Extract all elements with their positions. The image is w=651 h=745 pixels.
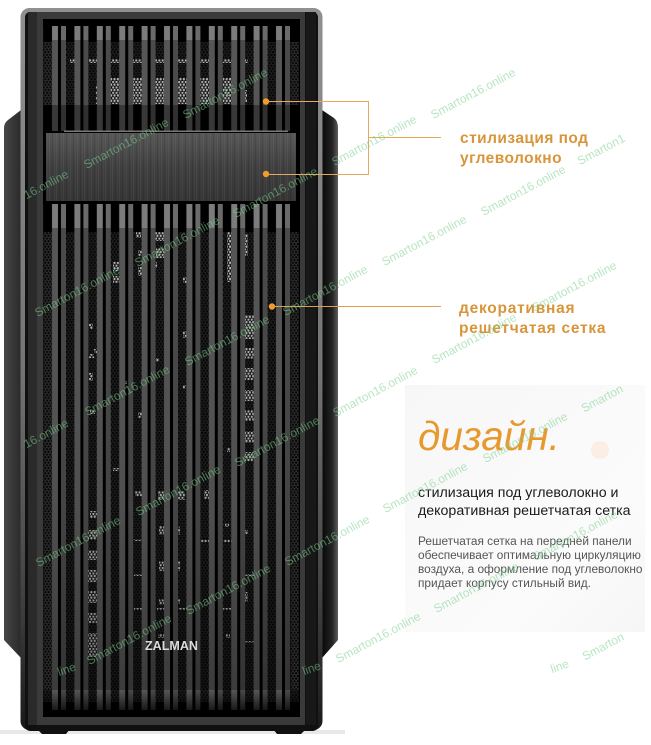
right side bulge xyxy=(322,110,338,658)
carbon fibre panel xyxy=(46,133,296,201)
watermarks: Smarton xyxy=(580,630,626,663)
ZALMAN logo: ZALMAN xyxy=(145,638,198,653)
watermarks: line xyxy=(548,656,571,676)
watermarks: Smarton16.online xyxy=(429,310,519,367)
callout dot top xyxy=(263,98,269,105)
label: decorative mesh: решетчатая сетка xyxy=(459,320,606,337)
lower slats xyxy=(44,204,291,710)
watermarks: Smarton16.online xyxy=(333,609,423,666)
watermarks: line xyxy=(300,658,323,678)
left side bulge xyxy=(4,110,21,658)
watermarks: Smarton16.online xyxy=(81,115,171,172)
front bezel xyxy=(37,12,305,725)
watermarks: Smarton16.online xyxy=(380,459,470,516)
callout: carbon fibre leader lines xyxy=(263,98,441,177)
watermarks: Smarton16.online xyxy=(132,213,222,270)
watermarks: Smarton16.online xyxy=(82,362,172,419)
watermarks: line xyxy=(55,659,78,679)
top slats xyxy=(44,26,291,131)
lower grille xyxy=(43,204,300,710)
watermarks: Smarton16.online xyxy=(232,413,322,470)
floor shadow xyxy=(0,730,345,734)
watermarks: Smarton16.online xyxy=(478,162,568,219)
watermarks: Smarton16.online xyxy=(33,513,123,570)
body text: Решетчатая сетка на передней панели xyxy=(418,534,632,548)
watermarks: Smarton16.online xyxy=(379,212,469,269)
body text: придает корпусу стильный вид. xyxy=(418,576,591,590)
watermarks: Smarton16.online xyxy=(180,65,270,122)
label: carbon fibre styling: углеволокно xyxy=(460,150,562,167)
mesh columns lower xyxy=(44,232,299,702)
watermarks: Smarton16.online xyxy=(282,512,372,569)
watermarks xyxy=(21,65,628,679)
case body xyxy=(20,8,322,730)
white mesh highlights lower xyxy=(88,232,255,657)
watermarks: Smarton16.online xyxy=(230,164,320,221)
watermarks: Smarton16.online xyxy=(529,258,619,315)
watermarks: Smarton16.online xyxy=(428,65,518,122)
faint glow spot xyxy=(591,441,609,459)
body text: обеспечивает оптимальную циркуляцию xyxy=(418,548,641,562)
watermarks: 16.online xyxy=(21,416,71,451)
computer case xyxy=(0,8,345,734)
watermarks: Smarton16.online xyxy=(530,507,620,564)
white mesh highlights top xyxy=(70,59,248,104)
feet xyxy=(37,729,306,734)
watermarks: Smarton16.online xyxy=(431,559,521,616)
callout dot bottom xyxy=(263,171,269,177)
label: carbon fibre styling: стилизация под xyxy=(460,130,588,147)
watermarks: Smarton16.online xyxy=(133,462,223,519)
text card background xyxy=(405,385,645,632)
top grille xyxy=(43,26,300,132)
body text: воздуха, а оформление под углеволокно xyxy=(418,562,643,576)
mesh columns top xyxy=(44,42,299,105)
watermarks: Smarton16.online xyxy=(329,112,419,169)
label: decorative mesh: декоративная xyxy=(459,300,575,317)
watermarks: Smarton xyxy=(579,382,625,415)
watermarks: Smarton16.online xyxy=(183,561,273,618)
watermarks: Smarton1 xyxy=(575,131,628,168)
callout: mesh leader line xyxy=(269,303,441,310)
watermarks: Smarton16.online xyxy=(182,312,272,369)
subheading: стилизация под углеволокно и xyxy=(418,485,618,501)
subheading: декоративная решетчатая сетка xyxy=(418,503,631,519)
watermarks: Smarton16.online xyxy=(280,262,370,319)
callout dot mesh xyxy=(269,303,275,310)
watermarks: 16.online xyxy=(21,167,71,202)
watermarks: Smarton16.online xyxy=(480,409,570,466)
watermarks: Smarton16.online xyxy=(32,263,122,320)
heading: дизайн. xyxy=(418,413,560,459)
watermarks: Smarton16.online xyxy=(330,363,420,420)
watermarks: Smarton16.online xyxy=(84,611,174,668)
